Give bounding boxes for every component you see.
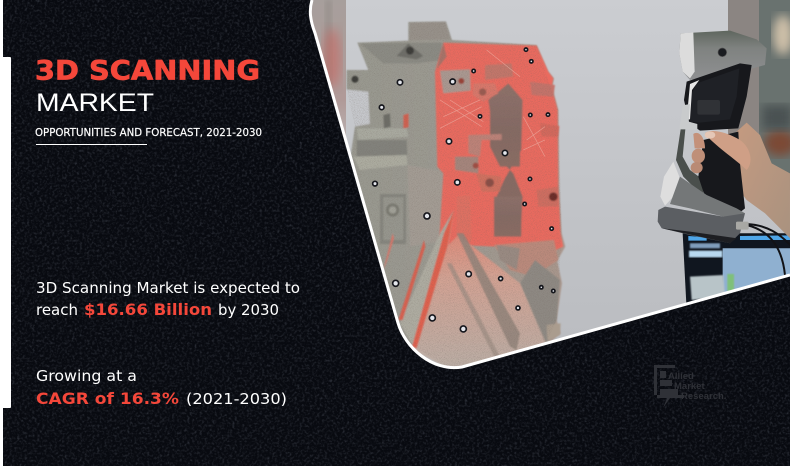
title: 3D SCANNING: 3D SCANNING xyxy=(35,56,260,86)
text block: market value: by 2030 xyxy=(218,301,279,319)
photo backdrop xyxy=(305,0,790,380)
forearm behind the scanner xyxy=(737,123,790,238)
tracking marker dots xyxy=(373,48,555,332)
scan mesh lines xyxy=(440,50,545,157)
text block: market value: $16.66 Billion xyxy=(84,300,212,319)
logo: Allied Market Research watermark xyxy=(654,365,726,408)
text block: market value: reach xyxy=(36,301,78,319)
text block: growth rate: (2021-2030) xyxy=(186,390,287,408)
fingers wrapped around the grip xyxy=(691,131,751,173)
handheld 3D scanner xyxy=(658,31,790,275)
scanner side rail xyxy=(676,129,703,197)
text block: market value: 3D Scanning Market is expected to xyxy=(36,279,300,297)
monitor in the background xyxy=(683,233,790,310)
grain overlay on the casting xyxy=(347,21,562,373)
scanner cable xyxy=(747,225,785,275)
text block: growth rate: CAGR of 16.3% xyxy=(36,389,179,408)
text block: growth rate: Growing at a xyxy=(36,367,137,385)
logo: Allied Market Research watermark: Research. xyxy=(681,391,726,402)
white left accent bar xyxy=(0,57,11,408)
subtitle underline xyxy=(36,144,147,145)
title: MARKET: MARKET xyxy=(36,89,154,117)
scanner top head xyxy=(679,31,767,80)
scanner upper body xyxy=(684,63,752,131)
panel: photo of 3D scanner and engine block xyxy=(305,0,790,380)
logo: Allied Market Research watermark: Allied xyxy=(668,371,694,382)
dome casting at the base xyxy=(383,210,547,373)
white photo border xyxy=(310,0,790,368)
text block: growth rate xyxy=(36,367,287,408)
engine block xyxy=(347,21,565,373)
scanner lower head xyxy=(660,162,680,206)
red scanned area xyxy=(435,43,563,343)
text block: market value xyxy=(36,279,300,319)
subtitle: OPPORTUNITIES AND FORECAST, 2021-2030 xyxy=(35,127,262,139)
scanner grip xyxy=(698,132,745,215)
engine gray silhouette xyxy=(347,21,565,373)
logo: Allied Market Research watermark: Market xyxy=(674,381,705,392)
